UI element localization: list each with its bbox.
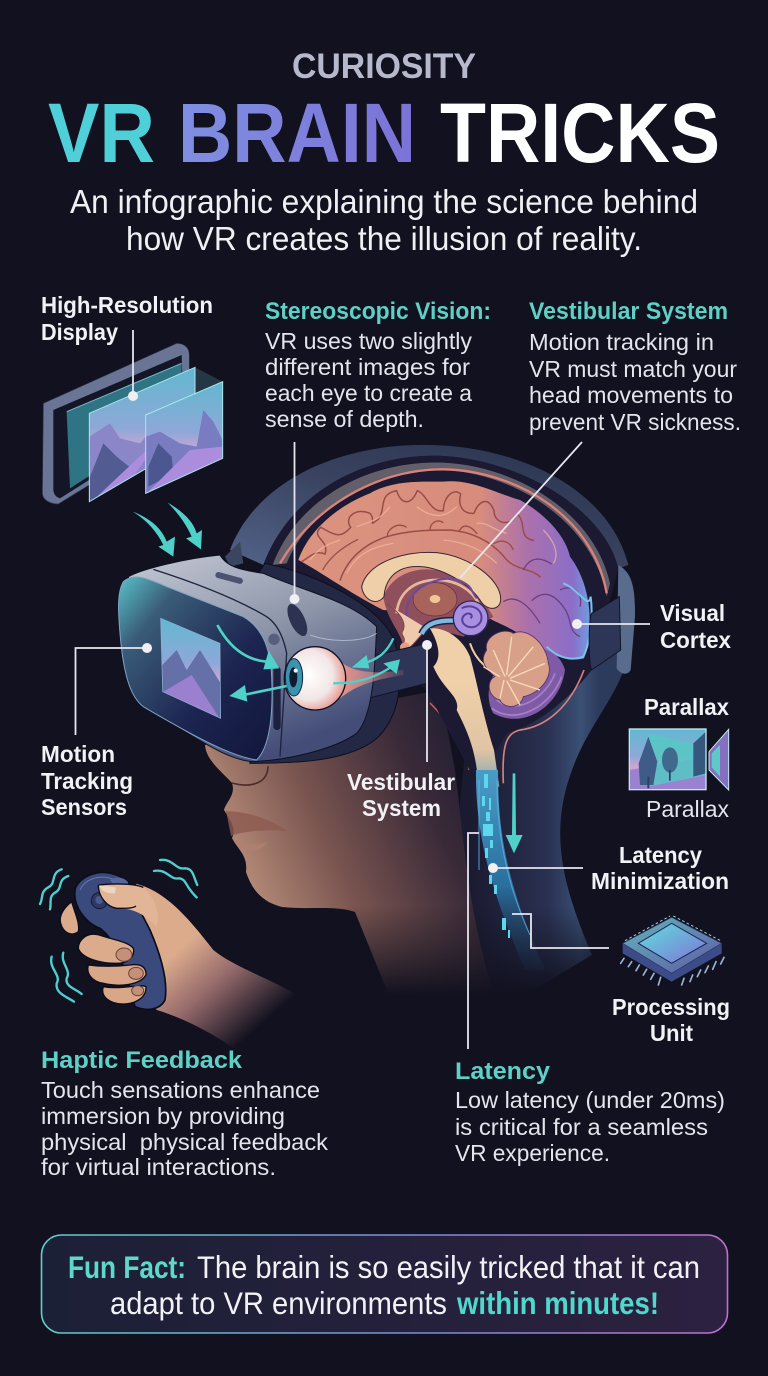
- icon: visor screen: [161, 618, 221, 718]
- label: vestibular system: [347, 769, 455, 821]
- icon: vibration waves: [40, 860, 197, 1002]
- label: motion tracking sensors: Motion: [41, 741, 115, 767]
- icon: high-resolution display with stereo panels: [42, 343, 223, 504]
- icon: vestibular canal and cochlea: [422, 621, 457, 634]
- icon: foam and strap: [230, 563, 427, 763]
- leader: motion tracking: [76, 643, 152, 735]
- label: parallax: Parallax: [644, 694, 729, 720]
- title: VR Brain Tricks: [48, 86, 720, 180]
- text block: haptic feedback: [41, 1047, 328, 1180]
- text block: stereoscopic vision: each eye to create a: [265, 380, 473, 406]
- label: high-resolution display: High-Resolution: [41, 292, 213, 318]
- text block: vestibular system: Motion tracking in: [529, 329, 714, 355]
- leader: vestibular system: [422, 640, 432, 762]
- icon: eyeball: [284, 647, 403, 710]
- text block: stereoscopic vision: sense of depth.: [265, 406, 424, 432]
- icon: fingers: [98, 884, 158, 927]
- label: motion tracking sensors: Sensors: [41, 794, 127, 820]
- label: high-resolution display: Display: [41, 319, 118, 345]
- text block: latency: [455, 1058, 725, 1166]
- icon: cerebellum: [489, 647, 565, 719]
- callout: fun fact: Fun Fact:: [68, 1249, 186, 1285]
- text block: haptic feedback: physical physical feedback: [41, 1129, 328, 1155]
- text block: stereoscopic vision: different images for: [265, 354, 470, 380]
- label: parallax: Parallax: [646, 796, 729, 822]
- down arrow on spinal cord: [506, 773, 523, 853]
- label: motion tracking sensors: [41, 741, 133, 820]
- icon: forearm: [100, 884, 300, 1048]
- text block: haptic feedback: Haptic Feedback: [41, 1047, 242, 1074]
- title: VR Brain Tricks: TRICKS: [440, 86, 720, 180]
- leader: vestibular system top: [460, 442, 582, 578]
- label: vestibular system: System: [362, 795, 441, 821]
- label: latency minimization: Latency: [619, 842, 702, 868]
- label: parallax: [644, 694, 729, 822]
- label: processing unit: Unit: [650, 1020, 693, 1046]
- text block: latency: Low latency (under 20ms): [455, 1087, 725, 1113]
- illustration: right head strap: [589, 565, 635, 674]
- text block: haptic feedback: immersion by providing: [41, 1103, 285, 1129]
- icon: inner brain and corpus callosum: [383, 569, 493, 647]
- text block: stereoscopic vision: VR uses two slightly: [265, 328, 472, 354]
- label: visual cortex: Visual: [660, 600, 725, 626]
- text block: vestibular system: head movements to: [529, 382, 733, 408]
- illustration: head silhouette and neck: [205, 640, 632, 1015]
- icon: hand holding haptic controller: [40, 860, 300, 1048]
- subtitle: An infographic explaining the science behind: [70, 183, 698, 220]
- icon: headset body: [119, 542, 377, 762]
- title: VR Brain Tricks: BRAIN: [178, 86, 416, 180]
- leader: latency: [468, 833, 479, 1049]
- callout: fun fact: [42, 1235, 728, 1333]
- title: VR Brain Tricks: VR: [48, 86, 155, 180]
- icon: head band: [230, 445, 628, 568]
- text block: stereoscopic vision: [265, 298, 491, 432]
- arrows: signal arrows around the eye: [217, 625, 400, 702]
- subtitle: how VR creates the illusion of reality.: [126, 220, 642, 257]
- text block: vestibular system: VR must match your: [529, 356, 737, 382]
- label: visual cortex: Cortex: [660, 627, 731, 653]
- callout: fun fact: within minutes!: [456, 1285, 659, 1321]
- leader: processing unit: [512, 914, 609, 948]
- text block: latency: VR experience.: [455, 1140, 610, 1166]
- label: processing unit: [612, 994, 730, 1046]
- icon: brain stem: [430, 628, 499, 787]
- text block: vestibular system: Vestibular System: [529, 298, 728, 325]
- icon: parallax: [629, 729, 729, 790]
- icon: front visor: [119, 577, 272, 760]
- subtitle: [70, 183, 698, 257]
- icon: controller: [75, 872, 166, 1009]
- illustration: VR headset: [119, 542, 427, 763]
- leader lines: [76, 330, 650, 1049]
- heading: curiosity: CURIOSITY: [292, 47, 476, 86]
- illustration: cord / signal: [476, 770, 545, 970]
- label: motion tracking sensors: Tracking: [41, 768, 133, 794]
- label: vestibular system: Vestibular: [347, 769, 455, 795]
- illustration: brain cross-section: [230, 445, 628, 787]
- text block: haptic feedback: Touch sensations enhance: [41, 1077, 320, 1103]
- label: high-resolution display: [41, 292, 213, 345]
- text block: stereoscopic vision: Stereoscopic Vision:: [265, 298, 491, 325]
- callout: fun fact: adapt to VR environments: [110, 1285, 447, 1321]
- text block: vestibular system: prevent VR sickness.: [529, 409, 741, 435]
- label: processing unit: Processing: [612, 994, 730, 1020]
- leader: latency minimization: [488, 863, 583, 873]
- label: latency minimization: Minimization: [591, 868, 729, 894]
- leader: visual cortex: [572, 619, 650, 629]
- label: visual cortex: [660, 600, 731, 653]
- text block: haptic feedback: for virtual interactions.: [41, 1154, 276, 1180]
- label: latency minimization: [591, 842, 729, 894]
- leader: stereoscopic vision: [290, 442, 300, 604]
- icon: processing unit chip: [621, 916, 724, 985]
- text block: latency: Latency: [455, 1058, 550, 1085]
- icon: cortex: [298, 481, 590, 659]
- arrows: display to headset: [133, 503, 202, 557]
- callout: fun fact: The brain is so easily tricked that it can: [197, 1249, 700, 1285]
- leader: high-resolution display: [128, 330, 138, 401]
- text block: latency: is critical for a seamless: [455, 1114, 708, 1140]
- text block: vestibular system: [529, 298, 741, 435]
